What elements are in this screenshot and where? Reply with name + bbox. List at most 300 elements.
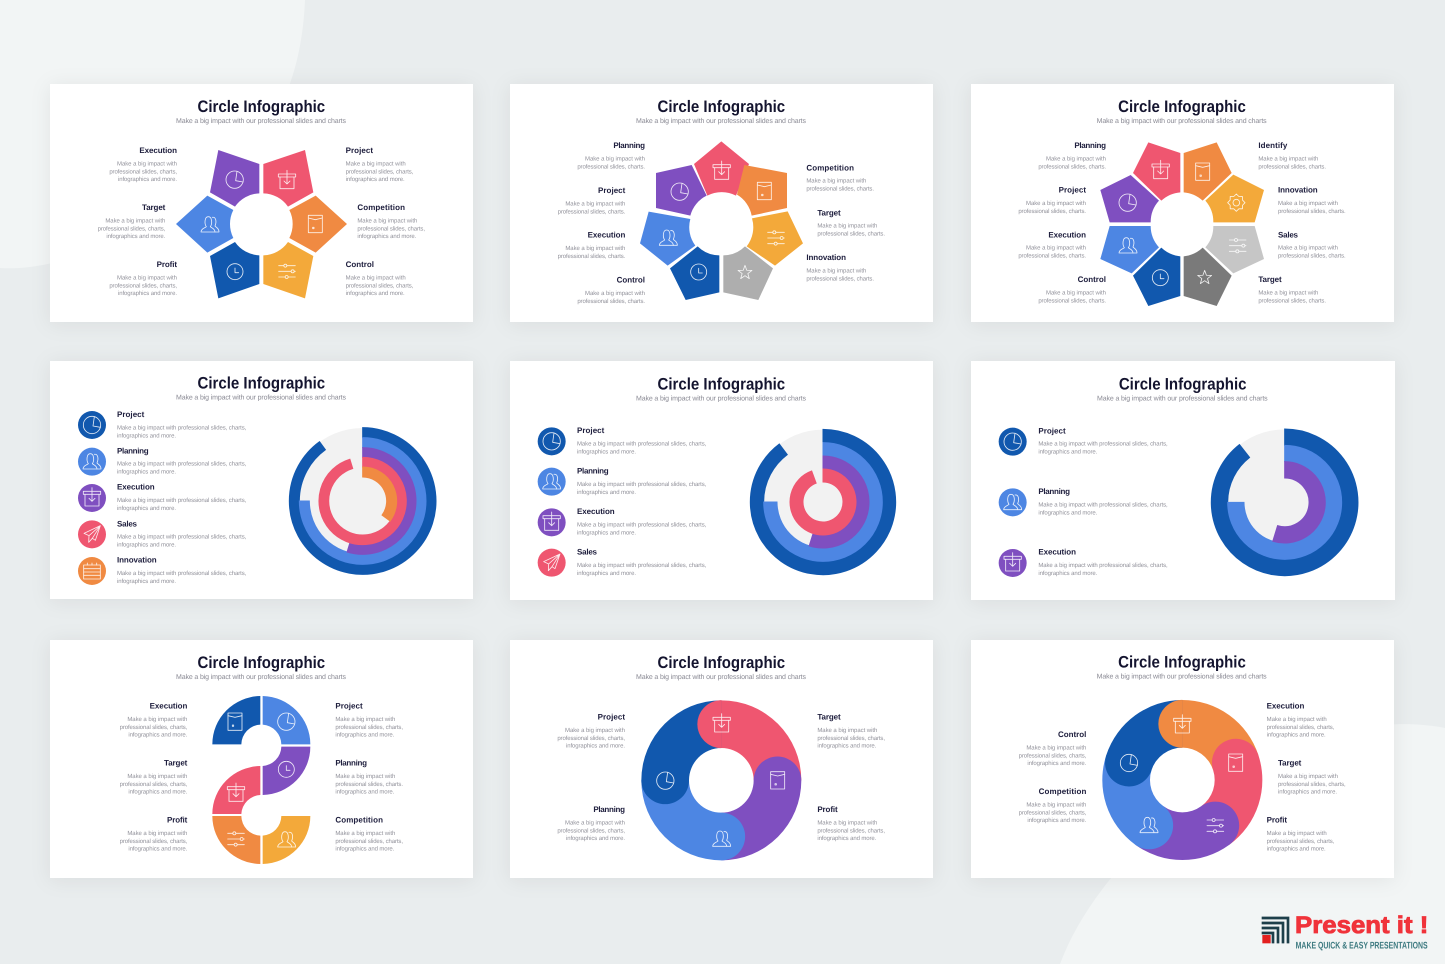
label: Profit: Make a big impact with — [127, 830, 187, 836]
label: Profit — [120, 816, 187, 852]
subtitle: Make a big impact with our professional slides and charts — [1097, 394, 1268, 402]
title: Circle Infographic — [197, 97, 325, 116]
icon: pie — [1119, 194, 1136, 211]
label: Execution — [1038, 548, 1168, 576]
icon: envelope — [228, 713, 242, 730]
label: Competition: professional slides, charts, — [335, 838, 403, 844]
panel card — [971, 361, 1395, 600]
label: Execution: Execution — [117, 483, 155, 492]
label: Target: Make a big impact with — [105, 217, 165, 224]
label: Innovation: professional slides, charts. — [806, 275, 874, 282]
icon badge: Project — [999, 428, 1027, 456]
panel card — [510, 84, 933, 322]
label: Competition: Make a big impact with — [1026, 801, 1086, 808]
panel card — [510, 361, 933, 600]
petal: yellow — [747, 211, 803, 266]
label: Profit — [109, 260, 177, 296]
logo name: Present it ! — [1295, 912, 1428, 938]
label: Planning: Make a big impact with — [585, 155, 645, 162]
label: Competition: Make a big impact with — [335, 830, 395, 836]
label: Project: Make a big impact with — [565, 200, 625, 207]
petal: purple — [656, 165, 707, 216]
ring chart — [1211, 429, 1358, 576]
label: Target: professional slides, charts, — [817, 735, 885, 741]
label: Innovation: professional slides, charts. — [1278, 208, 1346, 214]
label: Execution: professional slides, charts, — [120, 724, 187, 730]
panel: five ring chart — [50, 361, 473, 599]
swirl donut — [1102, 700, 1262, 860]
label: Project: Make a big impact with professional slides, charts, — [577, 440, 706, 447]
label: Execution — [577, 507, 706, 536]
label: Execution — [1267, 702, 1334, 738]
label: Planning — [335, 759, 403, 795]
label: Sales — [1278, 230, 1346, 259]
icon badge: Execution — [999, 549, 1027, 577]
label: Target: Target — [817, 208, 841, 217]
label: Project — [1018, 186, 1086, 214]
label: Profit: Profit — [167, 816, 187, 825]
petal: pink — [263, 150, 313, 207]
label: Target: Target — [1278, 759, 1301, 768]
icon: people — [659, 230, 677, 245]
icon: people — [713, 831, 731, 846]
panel card — [50, 84, 473, 322]
label: Target: Target — [1258, 275, 1282, 284]
segment: blue — [263, 696, 310, 744]
petal: pink — [1133, 142, 1180, 201]
title: Circle Infographic — [197, 653, 325, 672]
label: Project: Project — [346, 146, 373, 155]
label: Identify: Identify — [1258, 141, 1288, 150]
icon badge: Planning — [78, 448, 106, 476]
label: Execution: professional slides, charts, — [1267, 724, 1334, 730]
label: Target: Make a big impact with — [1278, 773, 1338, 779]
label: Control: Make a big impact with — [585, 290, 645, 296]
label: Profit: Profit — [1267, 816, 1287, 825]
label: Target: infographics and more. — [106, 233, 165, 239]
label: Control: infographics and more. — [346, 290, 405, 296]
icon badge: Planning — [999, 488, 1027, 516]
label: Innovation: Innovation — [117, 556, 157, 565]
petal: orange — [289, 196, 347, 253]
label: Planning: infographics and more. — [566, 835, 625, 841]
label: Execution: infographics and more. — [118, 176, 177, 182]
icon badge: Project — [538, 427, 566, 455]
label: Target: infographics and more. — [817, 742, 876, 749]
label: Control: Make a big impact with — [346, 274, 406, 281]
label: Project — [335, 702, 403, 738]
label: Project: Project — [1038, 426, 1066, 435]
title: Circle Infographic — [1118, 97, 1246, 116]
label: Innovation — [117, 556, 246, 584]
label: Profit: Make a big impact with — [817, 819, 877, 826]
label: Planning: infographics and more. — [577, 489, 636, 495]
label: Planning: Make a big impact with professional slides, charts, — [577, 481, 706, 487]
label: Identify: professional slides, charts. — [1258, 163, 1326, 170]
logo: Present it — [1262, 912, 1428, 951]
label: Project: infographics and more. — [566, 742, 625, 749]
label: Sales: Sales — [1278, 230, 1298, 239]
icon: pie — [1120, 754, 1138, 772]
segment: purple — [263, 747, 310, 795]
label: Planning: Make a big impact with — [335, 773, 395, 779]
label: Innovation: Make a big impact with — [806, 267, 866, 274]
label: Control: Control — [346, 260, 374, 269]
label: Profit: professional slides, charts, — [109, 282, 177, 289]
icon badge: Innovation — [78, 557, 106, 585]
label: Planning: professional slides, charts. — [577, 163, 645, 170]
ring chart — [750, 429, 896, 575]
label: Planning — [1038, 487, 1168, 516]
label: Planning: professional slides, charts. — [1038, 163, 1106, 170]
subtitle: Make a big impact with our professional slides and charts — [636, 117, 806, 125]
label: Target: Target — [164, 759, 187, 768]
panel card — [50, 640, 473, 878]
label: Competition: Competition — [335, 816, 383, 825]
title: Circle Infographic — [1119, 374, 1246, 393]
label: Project: Project — [1059, 186, 1086, 195]
label: Control — [577, 276, 645, 304]
icon: sliders — [279, 264, 295, 278]
label: Project — [557, 713, 625, 749]
label: Target: Make a big impact with — [817, 727, 877, 733]
petal: navy — [670, 246, 719, 300]
label: Execution: Execution — [150, 702, 187, 711]
label: Competition — [357, 203, 425, 239]
label: Planning: Planning — [1074, 141, 1106, 150]
label: Control: professional slides, charts. — [1038, 297, 1106, 304]
icon: box — [1174, 715, 1191, 733]
background shape top left — [0, 0, 305, 268]
label: Profit: Profit — [817, 805, 838, 814]
label: Planning — [557, 805, 625, 841]
label: Project: Make a big impact with — [346, 160, 406, 167]
label: Sales — [577, 548, 706, 576]
icon: envelope — [757, 182, 771, 200]
petal: orange — [737, 165, 787, 216]
label: Project: Make a big impact with — [335, 716, 395, 722]
label: Execution: Execution — [1048, 230, 1086, 239]
label: Target: Target — [142, 203, 165, 212]
petal: purple — [1100, 175, 1159, 222]
label: Control: infographics and more. — [1027, 760, 1086, 766]
label: Identify: Make a big impact with — [1258, 155, 1318, 162]
label: Target: professional slides, charts, — [1278, 781, 1346, 787]
label: Identify — [1258, 141, 1326, 170]
label: Innovation: Make a big impact with — [1278, 200, 1338, 206]
logo mark — [1262, 918, 1288, 943]
icon badge: Execution — [538, 508, 566, 536]
icon badge: Planning — [538, 468, 566, 496]
label: Project: Project — [117, 410, 144, 419]
label: Competition: infographics and more. — [335, 845, 394, 852]
icon: envelope — [308, 215, 322, 233]
label: Target: Make a big impact with — [1258, 289, 1318, 296]
petal: orange — [1184, 142, 1232, 201]
icon badge: Execution — [78, 484, 106, 512]
label: Target: professional slides, charts. — [817, 230, 885, 237]
panel: four part swirl donut — [510, 640, 933, 878]
label: Project: Project — [598, 713, 625, 722]
petal: gray — [723, 246, 773, 300]
label: Project: infographics and more. — [1038, 448, 1097, 455]
label: Profit — [1267, 816, 1334, 852]
label: Execution: Make a big impact with — [117, 160, 177, 167]
panel card — [971, 640, 1394, 878]
label: Competition: professional slides, charts. — [806, 185, 874, 192]
label: Competition: Make a big impact with — [357, 217, 417, 224]
label: Execution: Make a big impact with — [127, 716, 187, 722]
label: Control: Control — [1078, 275, 1106, 284]
icon: envelope — [771, 772, 785, 789]
panel: five part swirl donut — [971, 640, 1394, 878]
label: Profit: infographics and more. — [1267, 845, 1326, 852]
label: Sales: infographics and more. — [577, 570, 636, 576]
label: Project — [558, 186, 625, 215]
petal: yellow — [1205, 175, 1264, 222]
panel: six petal circle — [50, 84, 473, 322]
label: Execution: Make a big impact with professional slides, charts, — [117, 497, 246, 503]
icon: pie — [657, 772, 674, 789]
label: Control: professional slides, charts. — [577, 298, 645, 304]
label: Execution: professional slides, charts. — [1018, 252, 1086, 259]
label: Profit: infographics and more. — [128, 845, 187, 852]
icon: star — [1198, 270, 1212, 284]
label: Execution: infographics and more. — [1267, 731, 1326, 738]
label: Project: infographics and more. — [117, 432, 176, 439]
icon: clock — [227, 264, 243, 280]
label: Execution: Make a big impact with professional slides, charts, — [1038, 562, 1168, 568]
label: Execution: Execution — [1267, 702, 1304, 711]
label: Innovation: infographics and more. — [117, 578, 176, 584]
label: Project — [346, 146, 413, 182]
label: Execution: Execution — [577, 507, 615, 516]
panel card — [971, 84, 1394, 322]
label: Target: Make a big impact with — [817, 222, 877, 229]
icon: envelope — [1196, 163, 1210, 180]
label: Project: infographics and more. — [577, 448, 636, 455]
label: Profit: Profit — [157, 260, 177, 269]
label: Project: Project — [598, 186, 625, 195]
label: Project: infographics and more. — [346, 176, 405, 182]
label: Control: Make a big impact with — [1046, 289, 1106, 296]
panel: four ring chart — [510, 361, 933, 600]
panel: S curve — [50, 640, 473, 878]
label: Control: professional slides, charts, — [1019, 752, 1086, 759]
label: Execution — [109, 146, 177, 182]
icon: people — [278, 832, 296, 847]
segment: navy — [212, 696, 260, 744]
label: Sales: professional slides, charts. — [1278, 252, 1346, 259]
subtitle: Make a big impact with our professional slides and charts — [1097, 117, 1267, 125]
label: Control — [1038, 275, 1106, 304]
label: Planning — [117, 446, 246, 475]
label: Control: Make a big impact with — [1026, 744, 1086, 751]
label: Control — [346, 260, 413, 296]
subtitle: Make a big impact with our professional slides and charts — [176, 117, 346, 125]
swirl donut — [641, 700, 801, 860]
label: Target: professional slides, charts. — [1258, 297, 1326, 304]
label: Profit: professional slides, charts, — [1267, 838, 1334, 844]
icon: pie — [278, 713, 295, 730]
label: Project — [1038, 426, 1168, 455]
label: Project: professional slides, charts, — [335, 724, 403, 730]
petal: purple — [210, 150, 259, 207]
icon: clock — [278, 761, 294, 777]
label: Target: Target — [817, 713, 841, 722]
petal: dark gray — [1184, 248, 1232, 306]
label: Competition: Competition — [1039, 787, 1086, 796]
title: Circle Infographic — [1118, 653, 1246, 671]
label: Project: Make a big impact with — [1026, 200, 1086, 206]
petal: blue — [1100, 226, 1159, 273]
label: Project — [117, 410, 246, 439]
icon: pie — [671, 183, 688, 200]
label: Sales: Make a big impact with professional slides, charts, — [117, 533, 246, 540]
label: Target: professional slides, charts, — [120, 781, 187, 787]
label: Execution: professional slides, charts, — [109, 168, 177, 175]
panel card — [510, 640, 933, 878]
label: Control: Control — [617, 276, 645, 285]
label: Project: Make a big impact with professional slides, charts, — [117, 424, 246, 431]
icon: pie — [226, 171, 243, 188]
label: Execution: Make a big impact with professional slides, charts, — [577, 521, 706, 528]
label: Target — [1258, 275, 1326, 304]
label: Planning: Make a big impact with — [1046, 155, 1106, 162]
icon: star — [738, 265, 752, 279]
panel card — [50, 361, 473, 599]
petal: pink — [694, 141, 749, 196]
icon: box — [278, 170, 296, 189]
icon badge: Sales — [538, 549, 566, 577]
label: Project: infographics and more. — [335, 731, 394, 738]
subtitle: Make a big impact with our professional slides and charts — [636, 673, 806, 681]
title: Circle Infographic — [657, 653, 785, 672]
title: Circle Infographic — [197, 374, 325, 392]
label: Planning: Planning — [335, 759, 367, 768]
label: Planning: Make a big impact with — [565, 819, 625, 826]
label: Competition — [806, 163, 874, 192]
segment: orange — [212, 816, 260, 864]
label: Competition: professional slides, charts, — [357, 225, 425, 232]
label: Sales — [117, 519, 246, 548]
label: Planning: Make a big impact with professional slides, charts, — [117, 460, 246, 467]
label: Planning: infographics and more. — [117, 468, 176, 475]
label: Profit: Make a big impact with — [117, 274, 177, 281]
label: Execution: Execution — [588, 231, 625, 240]
label: Profit: Make a big impact with — [1267, 830, 1327, 836]
panel: eight petal circle — [971, 84, 1394, 322]
petal: blue — [176, 196, 233, 253]
label: Control: professional slides, charts, — [346, 282, 413, 289]
label: Planning: Planning — [613, 141, 645, 150]
segment: pink — [212, 766, 260, 814]
icon: envelope — [1229, 754, 1243, 771]
label: Target: professional slides, charts, — [98, 225, 165, 232]
label: Competition: infographics and more. — [1027, 817, 1086, 823]
icon badge: Project — [78, 411, 106, 439]
petal: navy — [210, 242, 259, 298]
label: Execution — [1018, 230, 1086, 259]
segment: yellow — [263, 816, 310, 864]
label: Project: professional slides, charts, — [346, 168, 413, 175]
icon: box — [1152, 160, 1169, 179]
icon: gear — [1228, 194, 1245, 211]
icon: box — [713, 161, 730, 179]
label: Execution: Make a big impact with — [1267, 716, 1327, 722]
label: Competition: Competition — [357, 203, 405, 212]
label: Project — [577, 426, 706, 455]
petal: yellow — [263, 242, 313, 298]
label: Planning — [577, 141, 645, 170]
label: Innovation: Innovation — [806, 253, 846, 262]
label: Project: professional slides, charts. — [1018, 208, 1086, 214]
icon: box — [227, 783, 245, 801]
label: Project: Make a big impact with — [565, 727, 625, 733]
label: Planning: Planning — [1038, 487, 1070, 496]
label: Sales: Sales — [577, 548, 597, 557]
label: Execution: Execution — [1038, 548, 1076, 557]
label: Execution: infographics and more. — [117, 505, 176, 511]
petal: blue — [640, 212, 695, 266]
label: Profit: infographics and more. — [817, 835, 876, 841]
background shape bottom right — [1060, 724, 1445, 964]
label: Competition — [1019, 787, 1086, 823]
label: Competition: Competition — [806, 163, 854, 172]
label: Sales: Sales — [117, 519, 137, 528]
petal: navy — [1133, 248, 1180, 306]
label: Project: Project — [335, 702, 363, 711]
label: Planning: Planning — [577, 467, 609, 476]
subtitle: Make a big impact with our professional slides and charts — [1097, 673, 1267, 680]
label: Innovation — [1278, 186, 1346, 214]
label: Execution — [558, 231, 625, 259]
label: Execution: Make a big impact with — [565, 245, 625, 251]
label: Project: Make a big impact with professional slides, charts, — [1038, 440, 1168, 447]
label: Innovation: Make a big impact with professional slides, charts, — [117, 570, 246, 576]
label: Competition — [335, 816, 403, 852]
panel: seven petal circle — [510, 84, 933, 322]
label: Target — [1278, 759, 1346, 795]
label: Planning: infographics and more. — [335, 788, 394, 795]
label: Planning: professional slides, charts, — [557, 827, 625, 834]
icon: people — [1119, 238, 1137, 253]
label: Planning: infographics and more. — [1038, 509, 1097, 516]
label: Profit: infographics and more. — [118, 290, 177, 296]
label: Planning — [577, 467, 706, 495]
label: Target: infographics and more. — [128, 788, 187, 795]
label: Profit — [817, 805, 885, 841]
icon: sliders — [1229, 238, 1246, 253]
subtitle: Make a big impact with our professional slides and charts — [636, 394, 806, 402]
label: Execution: infographics and more. — [128, 731, 187, 738]
panel: three ring chart — [971, 361, 1395, 600]
subtitle: Make a big impact with our professional slides and charts — [176, 394, 346, 401]
label: Planning: professional slides, charts. — [335, 781, 403, 787]
label: Competition: Make a big impact with — [806, 177, 866, 184]
label: Target — [98, 203, 165, 239]
label: Execution: Make a big impact with — [1026, 244, 1086, 251]
icon: sliders — [768, 231, 784, 245]
label: Execution: infographics and more. — [1038, 570, 1097, 576]
label: Target: Make a big impact with — [127, 773, 187, 779]
label: Target: infographics and more. — [1278, 788, 1337, 795]
label: Sales: infographics and more. — [117, 541, 176, 548]
label: Competition: infographics and more. — [357, 233, 416, 239]
label: Planning — [1038, 141, 1106, 170]
label: Planning: Make a big impact with professional slides, charts, — [1038, 501, 1168, 508]
label: Profit: professional slides, charts, — [120, 838, 187, 844]
